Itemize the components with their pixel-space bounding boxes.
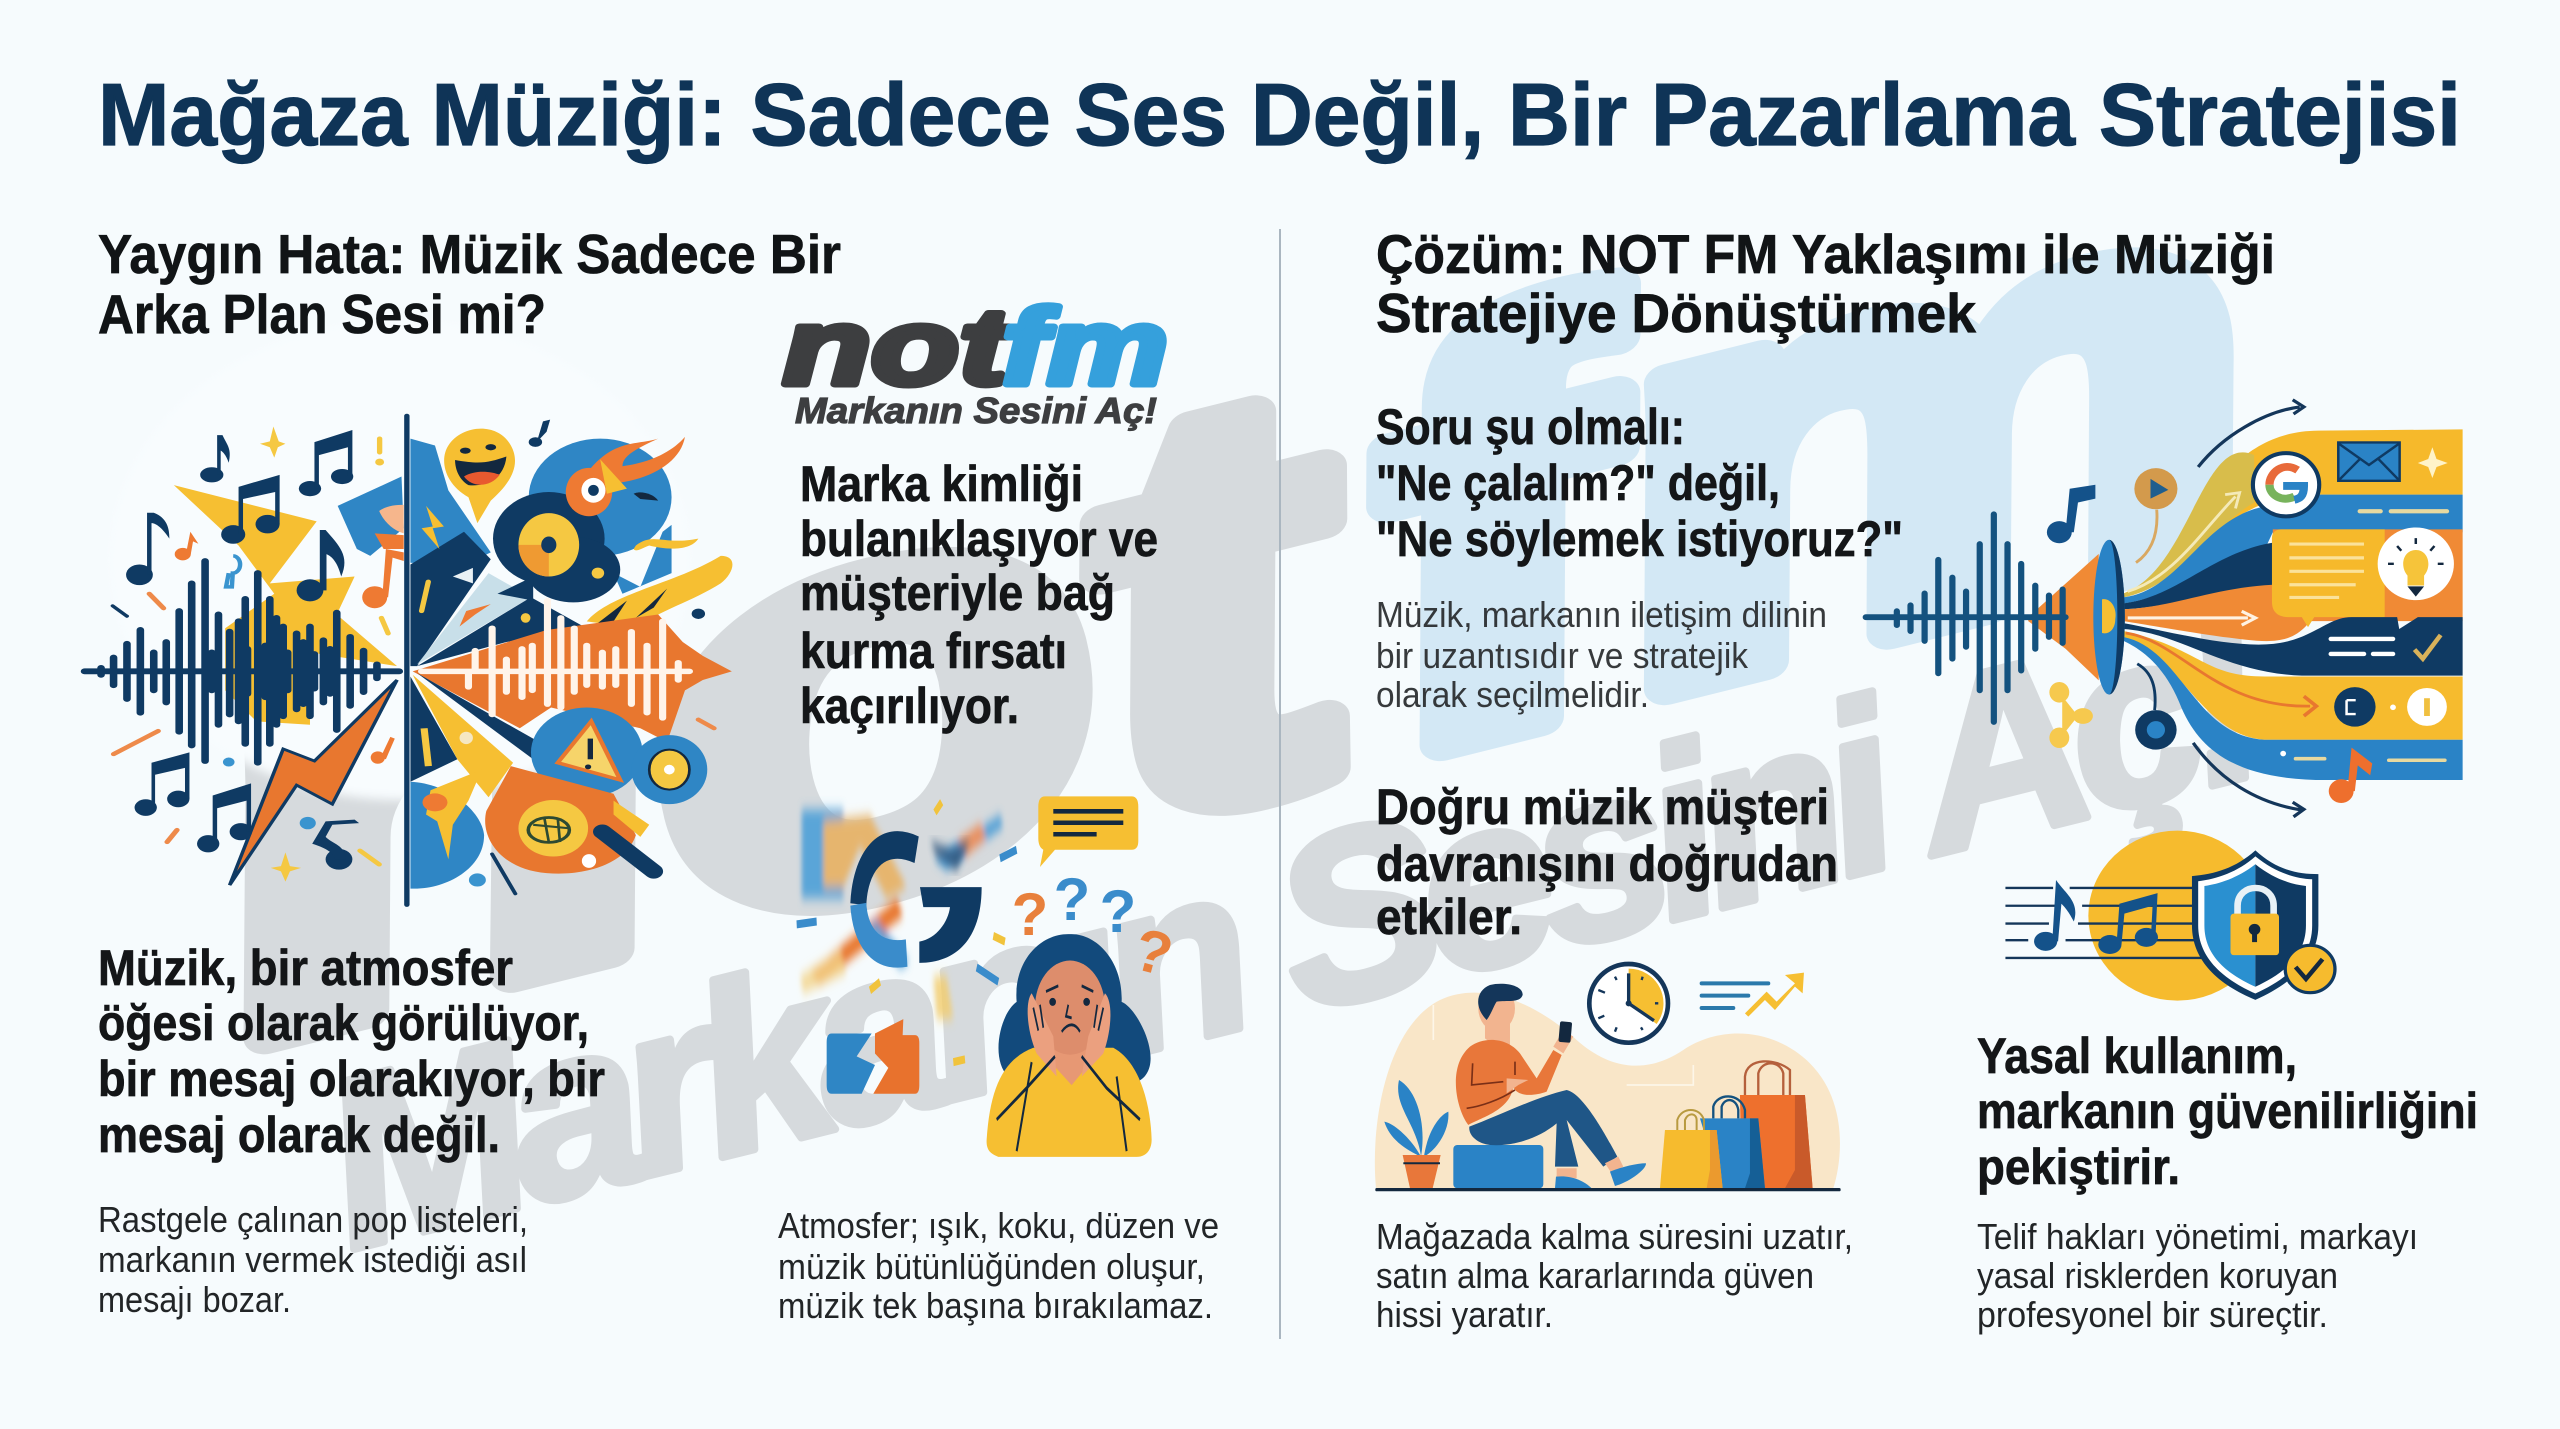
- question marks: ?: [1100, 878, 1136, 945]
- orange guitar body: [485, 766, 654, 874]
- lower right wedges: [413, 675, 513, 797]
- text: brand identity statement: müşteriyle bağ: [800, 565, 1115, 621]
- bottom blue band: [2124, 637, 2463, 780]
- text: brand identity statement: bulanıklaşıyor ve: [800, 511, 1158, 567]
- text: brand identity statement: kaçırılıyor.: [800, 678, 1019, 734]
- text: atmosphere detail: müzik tek başına bırakılamaz.: [778, 1285, 1213, 1326]
- illustration: megaphone strategy ribbons: [1866, 400, 2463, 1001]
- text: brand identity statement: kurma fırsatı: [800, 623, 1067, 679]
- illustration: chaotic music burst: [85, 414, 732, 907]
- icon: broken box: [827, 1019, 919, 1094]
- question marks: ?: [1054, 866, 1090, 933]
- blue flag left of divider: [338, 477, 404, 556]
- ribbon arrows: [2128, 493, 2240, 591]
- confetti: [870, 802, 1005, 1062]
- text: left bold statement: mesaj olarak değil.: [98, 1107, 500, 1163]
- orange lightning: [230, 680, 397, 885]
- right column heading: Stratejiye Dönüştürmek: [1376, 282, 1976, 344]
- sparkle: [2418, 447, 2448, 478]
- title: Mağaza Müziği: Sadece Ses Değil, Bir Pazarlama Stratejisi: [98, 65, 2461, 164]
- bulb icon: [2378, 527, 2454, 600]
- text: atmosphere detail: Atmosfer; ışık, koku, düzen ve: [778, 1205, 1219, 1246]
- input waveform: [1866, 514, 2066, 722]
- divider: [1279, 229, 1281, 1339]
- navy ribbon: [2124, 542, 2277, 609]
- left column heading: Yaygın Hata: Müzik Sadece Bir: [98, 223, 841, 285]
- small orange notes and accents: [175, 532, 404, 764]
- watermark: notfm logo: [116, 247, 2453, 1253]
- floating icons: [2047, 468, 2372, 803]
- icon: Google G badge: [2253, 453, 2319, 516]
- plant: [1384, 1080, 1448, 1188]
- cone: [2028, 554, 2099, 680]
- text: question statement: Soru şu olmalı:: [1376, 399, 1685, 455]
- right side shapes: [410, 439, 491, 566]
- text: right behaviour statement: Doğru müzik müşteri: [1376, 779, 1829, 835]
- center divider line: [404, 414, 410, 907]
- megaphone bell: [2093, 540, 2125, 695]
- left column heading: Arka Plan Sesi mi?: [98, 283, 546, 345]
- orange ribbon: [2124, 529, 2463, 641]
- navy waveform: [85, 561, 399, 763]
- vinyl disc: [493, 492, 620, 602]
- yellow band: [2124, 631, 2463, 740]
- yellow lightning: [174, 485, 397, 725]
- watermark: notfm logo: fm: [1294, 40, 2319, 865]
- text: left bold statement: bir mesaj olarakıyor, bir: [98, 1051, 605, 1107]
- watermark: notfm logo: not: [132, 261, 1429, 1154]
- notfm logo: [783, 286, 1168, 431]
- staff notes: [2034, 880, 2158, 954]
- text: question statement: "Ne söylemek istiyoruz?": [1376, 511, 1903, 567]
- yellow circle behind shield: [2088, 831, 2267, 1001]
- text: shopper detail: satın alma kararlarında güven: [1376, 1255, 1814, 1296]
- orange fan with white waveform: [413, 614, 732, 742]
- blue lower blob: [410, 782, 484, 889]
- blue ribbon: [2124, 495, 2463, 603]
- person: [1456, 984, 1646, 1188]
- text: communication detail: Müzik, markanın iletişim dilinin: [1376, 594, 1827, 635]
- top yellow ribbon: [2124, 429, 2463, 597]
- text: question statement: "Ne çalalım?" değil,: [1376, 455, 1780, 511]
- notfm logo: not: [783, 286, 1012, 407]
- shield with lock: [2192, 850, 2335, 1000]
- text: left detail: Rastgele çalınan pop listeleri,: [98, 1199, 528, 1240]
- text: communication detail: olarak seçilmelidir.: [1376, 674, 1649, 715]
- text: communication detail: bir uzantısıdır ve stratejik: [1376, 635, 1749, 676]
- question marks: ?: [1012, 881, 1048, 948]
- text: brand identity statement: Marka kimliği: [800, 456, 1083, 512]
- seat: [1453, 1145, 1543, 1188]
- emoji: [444, 429, 515, 523]
- text: legal detail: yasal risklerden koruyan: [1977, 1255, 2338, 1296]
- warning icon: [531, 708, 707, 804]
- illustration: shopper with clock and bags: [1375, 964, 1841, 1191]
- text: left bold statement: Müzik, bir atmosfer: [98, 940, 513, 996]
- shopping bags: [1660, 1061, 1813, 1188]
- question marks: ?: [1127, 915, 1180, 989]
- navy band: [2124, 617, 2463, 676]
- broken G: [858, 845, 917, 904]
- text: shopper detail: hissi yaratır.: [1376, 1294, 1553, 1335]
- text: left bold statement: öğesi olarak görülüyor,: [98, 995, 589, 1051]
- text: left detail: mesajı bozar.: [98, 1279, 291, 1320]
- clock: [1589, 964, 1668, 1043]
- outer arrows: [2198, 400, 2304, 467]
- text: right behaviour statement: davranışını doğrudan: [1376, 836, 1838, 892]
- illustration: confused woman with broken logo: [797, 796, 1152, 1157]
- notfm logo: fm: [1002, 286, 1168, 407]
- text: legal detail: profesyonel bir süreçtir.: [1977, 1294, 2328, 1335]
- notfm logo: Markanın Sesini Aç!: [795, 390, 1157, 431]
- growth arrow: [1702, 973, 1804, 1017]
- speech bubble: [1038, 796, 1138, 867]
- watermark: notfm logo: Markanın Sesini Aç!: [298, 558, 2293, 1299]
- woman: [987, 934, 1152, 1157]
- staff lines: [2005, 888, 2202, 958]
- floor line: [1375, 1188, 1841, 1191]
- blurred brand fragments: [800, 810, 1003, 1019]
- icon: envelope: [2338, 442, 2400, 481]
- flaming eye: [566, 437, 685, 516]
- beige backdrop: [1375, 993, 1840, 1188]
- text: legal statement: pekiştirir.: [1977, 1139, 2180, 1195]
- text: left detail: markanın vermek istediği asıl: [98, 1239, 527, 1280]
- text: legal statement: Yasal kullanım,: [1977, 1028, 2297, 1084]
- text: atmosphere detail: müzik bütünlüğünden oluşur,: [778, 1246, 1205, 1287]
- right column heading: Çözüm: NOT FM Yaklaşımı ile Müziği: [1376, 223, 2275, 285]
- backdrop knocking the watermark out behind the music burst: [110, 320, 690, 800]
- text: legal detail: Telif hakları yönetimi, markayı: [1977, 1216, 2418, 1257]
- speech panel: [2272, 529, 2385, 627]
- text: shopper detail: Mağazada kalma süresini uzatır,: [1376, 1216, 1853, 1257]
- text: legal statement: markanın güvenilirliğini: [1977, 1083, 2478, 1139]
- text: right behaviour statement: etkiler.: [1376, 889, 1522, 945]
- question marks: [1012, 866, 1180, 989]
- music notes: [126, 420, 550, 870]
